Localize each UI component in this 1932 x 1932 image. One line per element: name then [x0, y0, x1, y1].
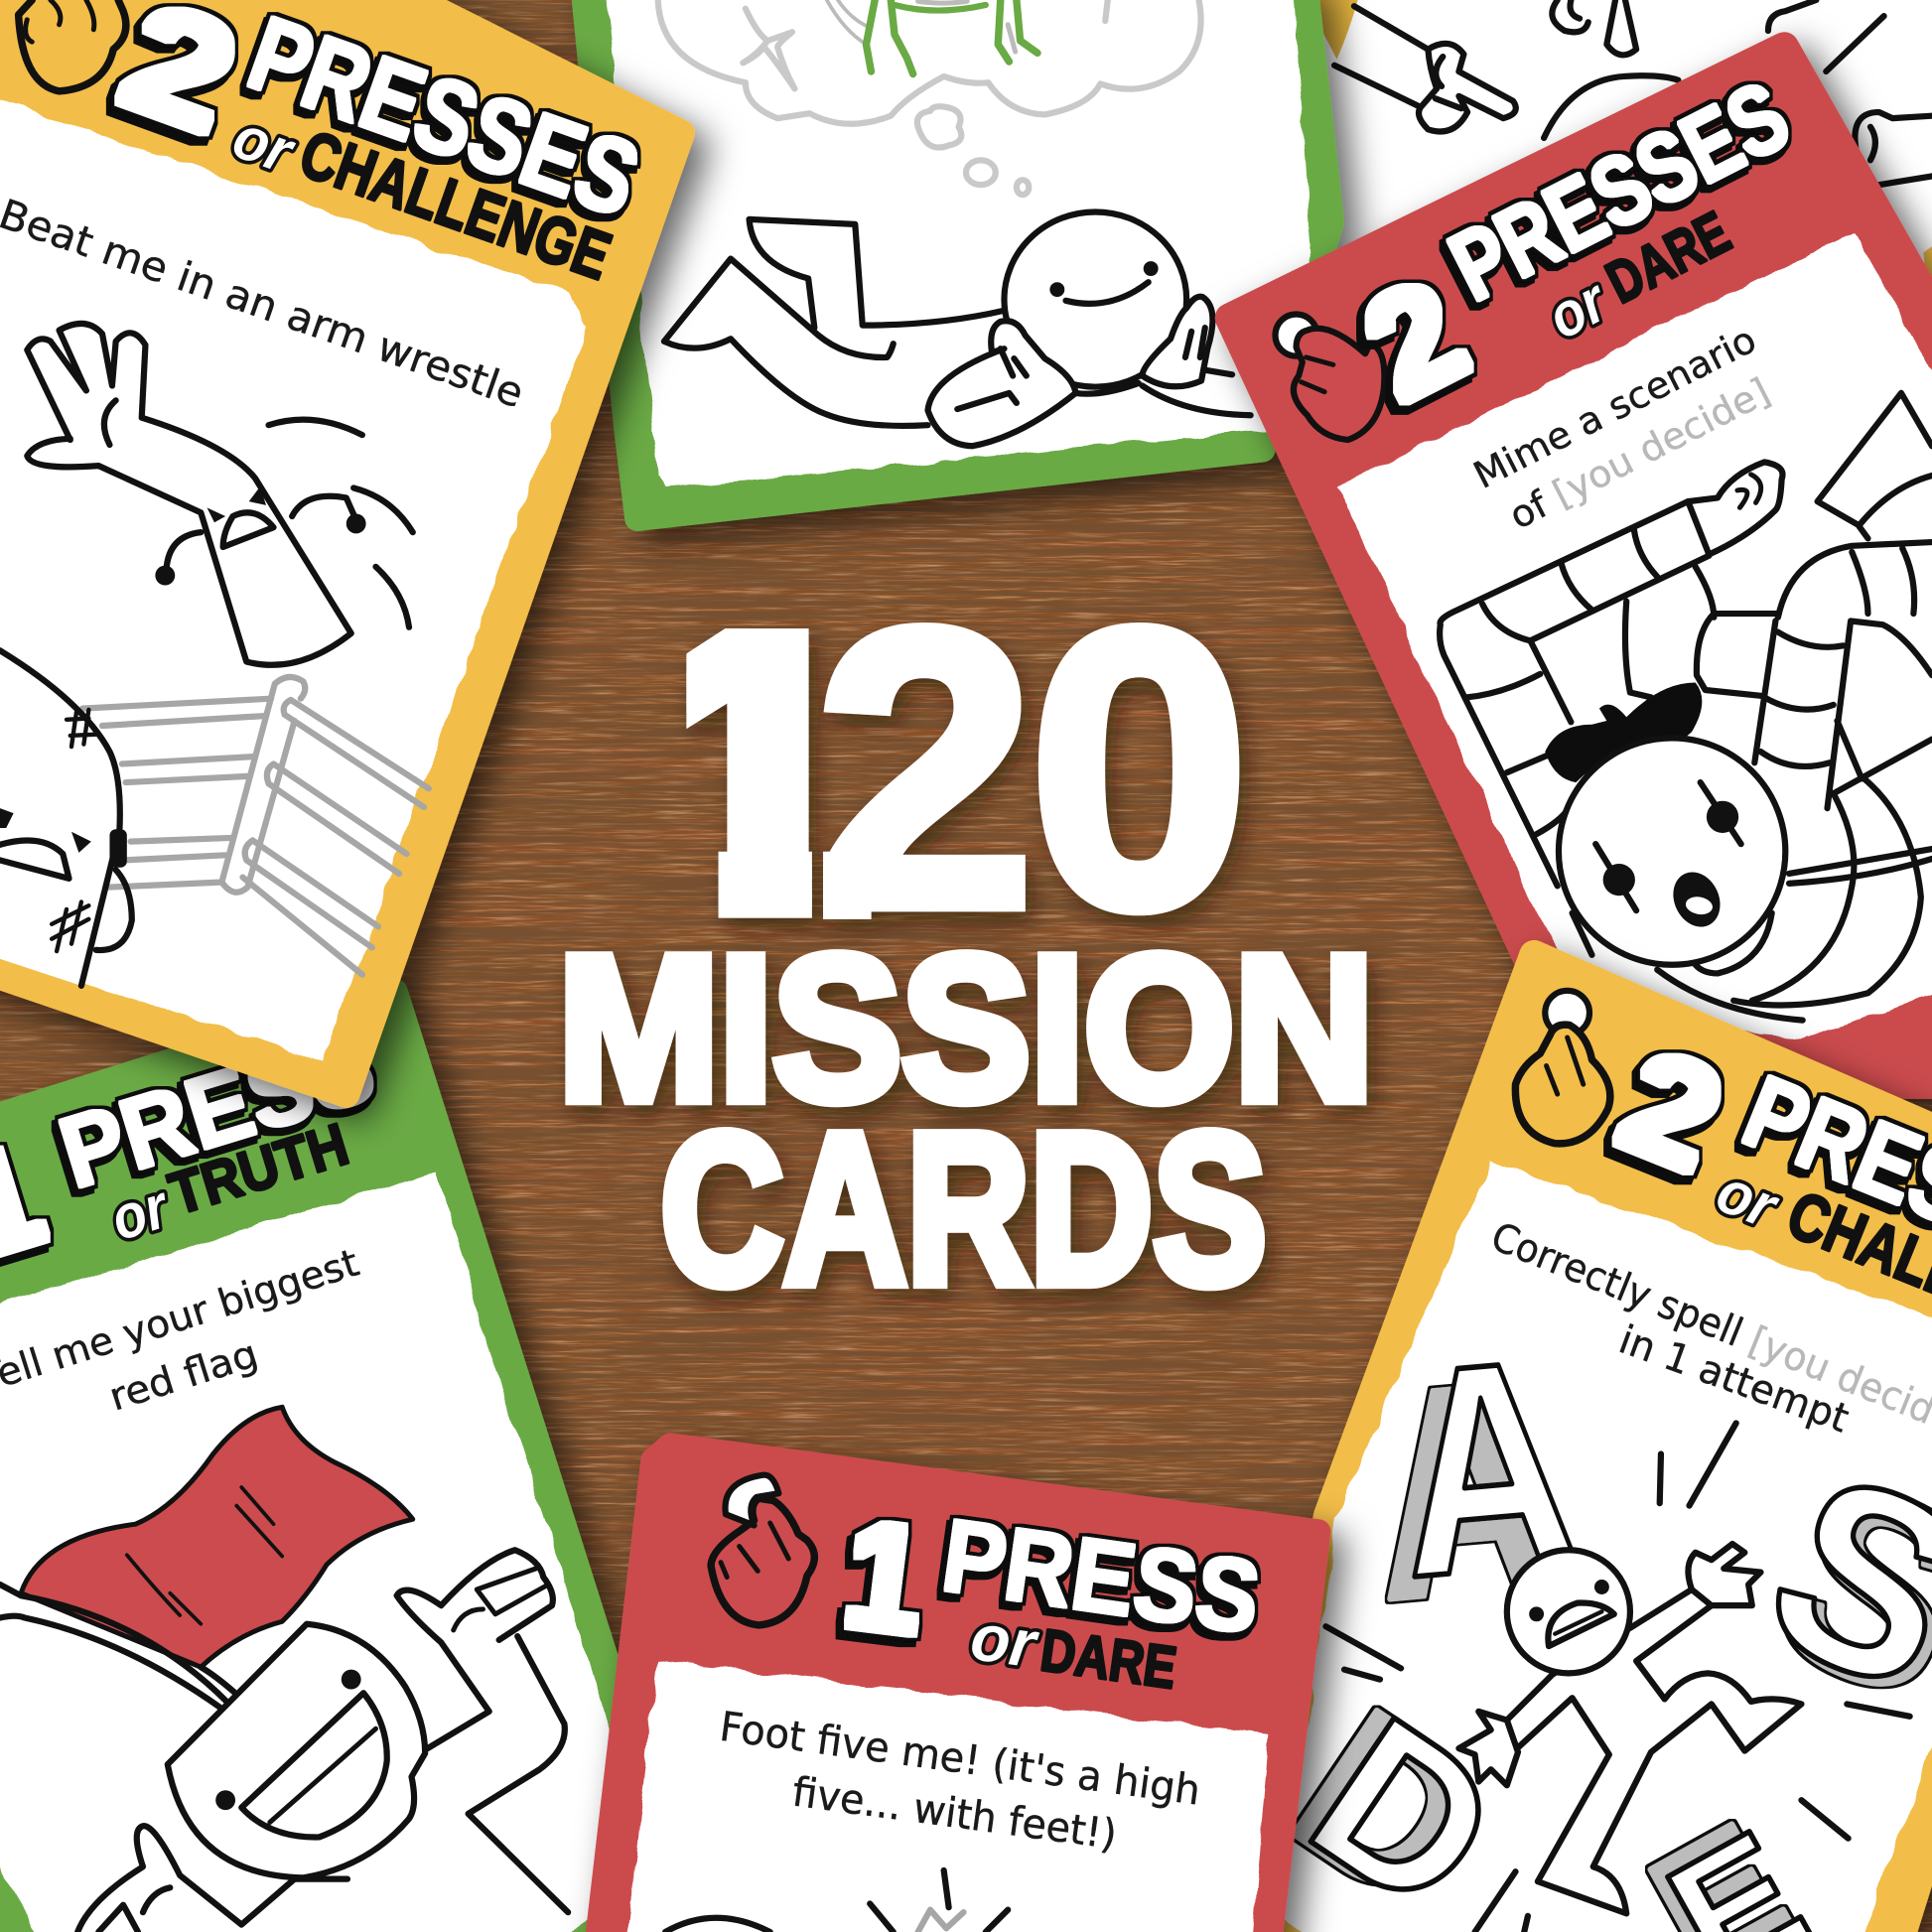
header: 2 presses or challenge: CHALLENGE — [291, 116, 620, 294]
icon: pressing hand — [19, 0, 126, 91]
panel: green card top centre — [583, 0, 1332, 518]
illustration: letters and figure: A — [1385, 1295, 1588, 1640]
header: 2 presses or challenge: PRESSES — [235, 0, 653, 239]
icon: pressing hand — [1276, 314, 1384, 440]
header: 1 press or dare: or — [966, 1599, 1043, 1683]
header: 2 presses or dare — [1340, 61, 1805, 431]
header: 1 press or truth: TRUTH — [162, 1110, 355, 1227]
header: 2 presses or dare: 2 — [1340, 248, 1489, 431]
icon: wrestling ring — [82, 677, 429, 975]
header: 1 press or truth: PRESS — [48, 1008, 386, 1210]
illustration: letters and figure — [1273, 1295, 1932, 1932]
header: 1 press or dare: 1 — [836, 1490, 932, 1666]
panel: red card bottom centre — [597, 1446, 1318, 1932]
title line: mission: MISSION — [558, 912, 1374, 1143]
card text: mime a scenario: Mime a scenario — [1466, 318, 1763, 497]
header: 1 press or truth — [0, 1008, 386, 1287]
header: 1 press or dare: DARE — [1036, 1616, 1180, 1702]
panel: yellow card top left — [0, 0, 681, 1094]
header: 2 presses or challenge — [1599, 1019, 1932, 1371]
header: 1 press or dare: PRESS — [935, 1498, 1267, 1656]
icon: pressing hand — [711, 1475, 814, 1625]
card text: foot five me: Foot five me! (it's a high — [717, 1703, 1203, 1815]
illustration: person lying down — [664, 211, 1251, 446]
icon: green donkey in thought — [827, 0, 1037, 73]
illustration: mime in a box — [1440, 393, 1932, 1021]
header: 1 press or dare — [836, 1490, 1267, 1702]
header: 2 presses or dare: DARE — [1595, 199, 1740, 316]
illustration: person holding red flag — [0, 1407, 568, 1932]
card text: mime a scenario: of [you decide] — [1502, 369, 1777, 538]
card text: beat me in an arm wrestle: Beat me in an arm wrestle — [0, 190, 530, 417]
icon: thought cloud — [658, 0, 1201, 195]
icon: pressing hand — [1515, 991, 1610, 1144]
card text: tell me your biggest red flag: red flag — [104, 1331, 263, 1421]
illustration: foot high five — [665, 1870, 1008, 1932]
header: 2 presses or challenge: or — [224, 102, 304, 188]
panel: green card bottom left — [0, 992, 628, 1932]
panel: red card right — [1230, 47, 1932, 1084]
title line: 120: 120 — [648, 546, 1250, 990]
header: 2 presses or dare: PRESSES — [1434, 61, 1805, 323]
header: 1 press or truth: or — [103, 1172, 178, 1254]
illustration: pointing hands — [1334, 0, 1932, 185]
header: 2 presses or dare: or — [1538, 266, 1619, 352]
illustration: arm wrestler — [27, 324, 413, 665]
card text: foot five me: five... with feet!) — [789, 1768, 1120, 1859]
panel: white card top right — [1282, 0, 1932, 321]
illustration: opponent head — [0, 643, 132, 986]
header: 2 presses or challenge — [102, 0, 653, 294]
card text: correctly spell: in 1 attempt — [1613, 1316, 1855, 1442]
header: 2 presses or challenge: 2 — [1599, 1019, 1743, 1202]
panel: yellow card bottom right — [1244, 955, 1932, 1932]
title line: cards: CARDS — [660, 1089, 1267, 1328]
header: 2 presses or challenge: or — [1708, 1157, 1788, 1243]
